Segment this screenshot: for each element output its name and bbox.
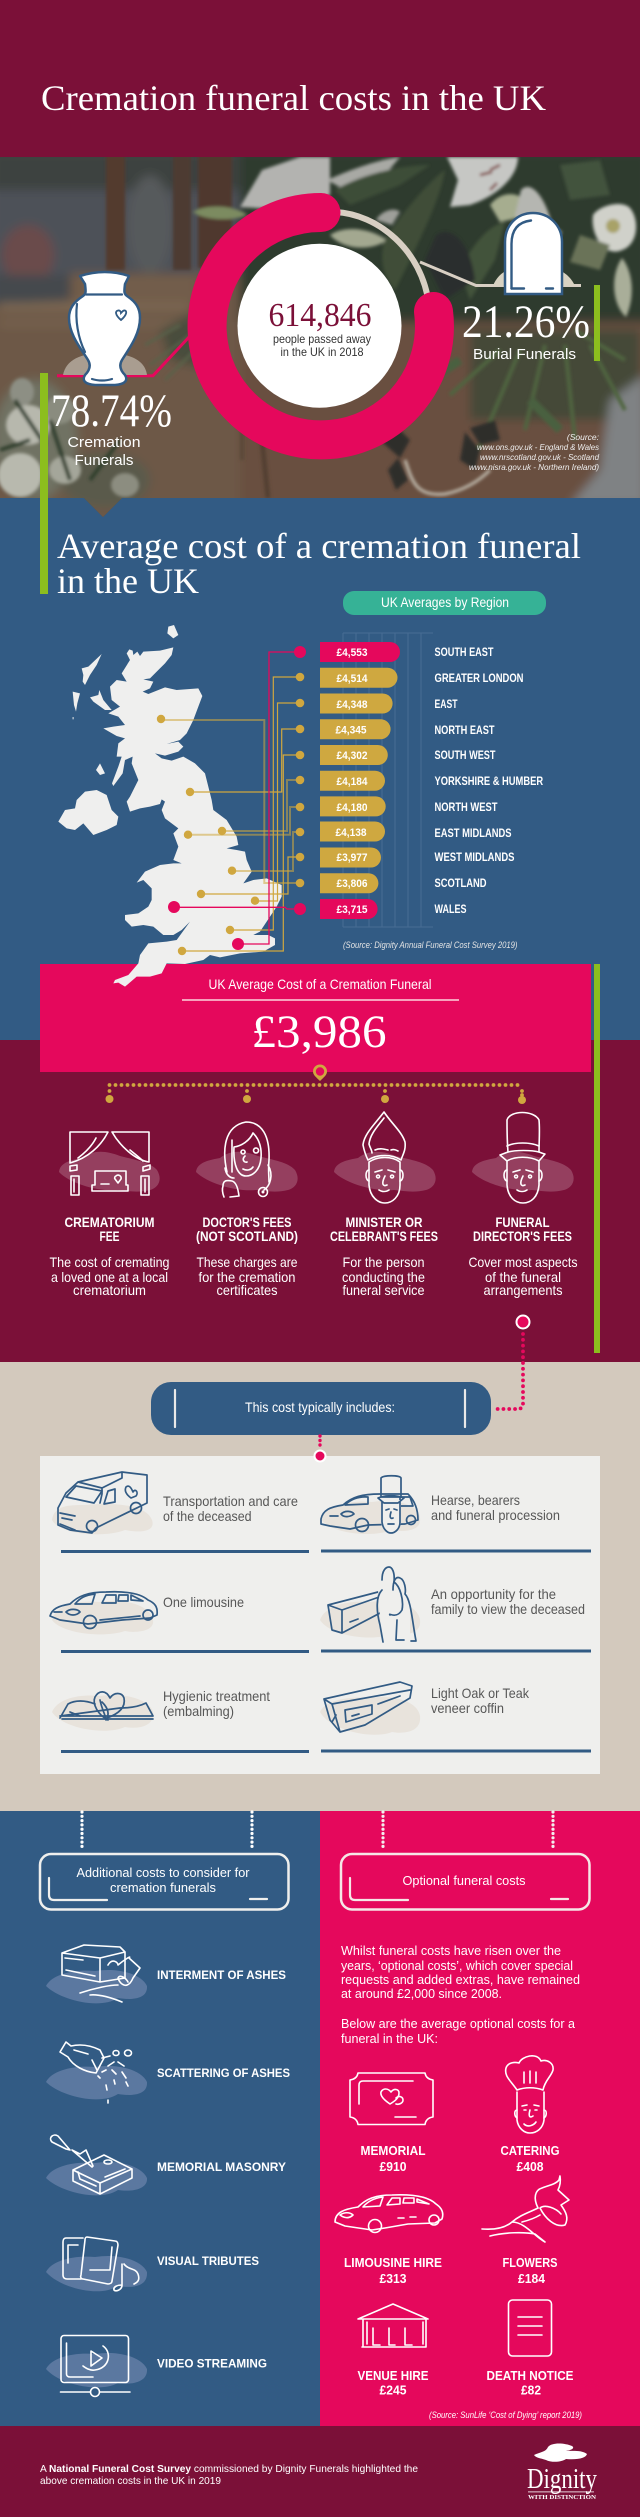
cremation ring — [207, 212, 434, 440]
section: fees background — [0, 1040, 640, 1362]
fee: doctor: DOCTOR'S FEES — [202, 1214, 292, 1230]
row: East Midlands: EAST MIDLANDS — [434, 828, 512, 840]
row: North West — [320, 796, 498, 816]
item: hearse and bearers: Hearse, bearers — [431, 1492, 520, 1508]
additional costs heading box — [40, 1854, 288, 1910]
chart grid — [343, 633, 433, 927]
item: visual tributes: VISUAL TRIBUTES — [157, 2254, 259, 2268]
pink dotted connector — [492, 1316, 530, 1409]
item: coffin: veneer coffin — [431, 1700, 504, 1716]
fee: minister: For the person — [342, 1254, 424, 1270]
item: video streaming — [46, 2336, 267, 2396]
burial connector line — [420, 262, 581, 286]
green accent bar — [40, 373, 48, 594]
icon: ambulance — [52, 1472, 153, 1534]
item: viewing: An opportunity for the — [431, 1586, 556, 1602]
cost: catering: CATERING — [500, 2143, 560, 2158]
row: North East: £4,345 — [336, 724, 366, 736]
fee: doctor — [196, 1122, 298, 1298]
icon: funeral director in top hat — [472, 1112, 574, 1203]
row: Greater London: £4,514 — [336, 673, 368, 685]
icon: limousine — [50, 1592, 157, 1634]
icon: photos and music note — [46, 2237, 147, 2291]
additional costs heading box: Additional costs to consider for — [76, 1865, 250, 1880]
source note: ONS, NRS, NISRA — [469, 432, 600, 472]
fee: funeral director — [468, 1112, 578, 1298]
footer text: above cremation costs in the UK in 2019 — [40, 2475, 221, 2487]
includes heading box: This cost typically includes: — [245, 1399, 395, 1415]
row: Wales: WALES — [434, 904, 467, 916]
Great Britain — [103, 647, 282, 987]
icon: family beside coffin — [320, 1567, 420, 1642]
fee: crematorium: CREMATORIUM — [64, 1214, 154, 1230]
row: Scotland — [320, 873, 486, 893]
Islay and Jura — [96, 763, 105, 775]
row: East Midlands — [320, 822, 512, 842]
includes heading box — [151, 1382, 491, 1435]
pink connector into panel — [314, 1436, 326, 1462]
heading: average cost — [57, 526, 581, 601]
icon: doctor with stethoscope — [196, 1122, 298, 1197]
heading: average cost: Average cost of a cremation funeral — [57, 526, 581, 566]
centre circle — [238, 244, 402, 408]
row: South West: £4,302 — [336, 750, 368, 762]
cost: venue hire — [358, 2304, 429, 2398]
row: South East: SOUTH EAST — [434, 647, 494, 659]
item: hearse and bearers: and funeral procession — [431, 1507, 560, 1523]
fee: funeral director: FUNERAL — [496, 1214, 550, 1230]
count caption — [273, 332, 371, 359]
row: Wales — [320, 899, 467, 919]
row: Yorkshire and Humber — [320, 771, 544, 791]
row: West Midlands: WEST MIDLANDS — [434, 852, 515, 864]
cost: flowers: FLOWERS — [502, 2255, 558, 2270]
row: Yorkshire and Humber: YORKSHIRE & HUMBER — [434, 776, 544, 788]
fee: minister — [330, 1112, 438, 1298]
burial arc — [335, 212, 429, 305]
fee: doctor: for the cremation — [198, 1269, 296, 1285]
row: Greater London — [320, 668, 524, 688]
footer text — [40, 2463, 418, 2487]
row: North West: £4,180 — [336, 802, 368, 814]
icon: gravestone — [493, 213, 575, 294]
fee: funeral director: of the funeral — [485, 1269, 561, 1285]
count caption: people passed away — [273, 332, 371, 346]
cost: venue hire: VENUE HIRE — [358, 2368, 429, 2383]
icon: notice page — [508, 2300, 552, 2356]
source note: ONS, NRS, NISRA: www.nrscotland.gov.uk - Scotland — [480, 452, 599, 462]
cost: death notice: DEATH NOTICE — [486, 2368, 574, 2383]
row: South East: £4,553 — [336, 647, 368, 659]
cost: memorial — [350, 2073, 433, 2174]
item: interment of ashes — [46, 1945, 286, 2003]
hanging dots — [383, 1812, 553, 1849]
icon: hearse with bearer — [320, 1476, 420, 1534]
fee: crematorium — [50, 1132, 170, 1298]
cost: limousine hire: £313 — [380, 2271, 406, 2286]
stat: burial share — [462, 285, 600, 363]
panel: optional costs — [320, 1811, 640, 2426]
fee: minister: CELEBRANT'S FEES — [330, 1228, 438, 1244]
cost: death notice — [486, 2300, 574, 2398]
fee: crematorium: The cost of cremating — [50, 1254, 170, 1270]
header band — [0, 0, 640, 157]
item: visual tributes — [46, 2237, 259, 2291]
source note: ONS, NRS, NISRA: www.nisra.gov.uk - Northern Ireland) — [469, 462, 599, 472]
row: South East — [320, 642, 494, 662]
optional costs heading box: Optional funeral costs — [402, 1873, 526, 1888]
bar chart: regional averages — [320, 642, 544, 919]
icon: urn — [63, 272, 147, 385]
row: North East: NORTH EAST — [434, 725, 494, 737]
item: scattering of ashes — [46, 2042, 290, 2103]
stat: cremation share: Funerals — [74, 453, 134, 469]
row: South West — [320, 745, 496, 765]
item: video streaming: VIDEO STREAMING — [157, 2356, 267, 2370]
stat: burial share: 21.26% — [462, 296, 590, 348]
source note: ONS, NRS, NISRA: www.ons.gov.uk - England & Wales — [477, 442, 600, 452]
stat: cremation share: 78.74% — [51, 385, 172, 437]
cost: death notice: £82 — [521, 2382, 541, 2398]
item: viewing: family to view the deceased — [431, 1601, 585, 1617]
item: coffin — [320, 1682, 530, 1735]
heading: average cost: in the UK — [57, 561, 199, 601]
gold connector tree — [106, 1065, 526, 1104]
fee: crematorium: FEE — [100, 1228, 120, 1244]
row: North East — [320, 719, 494, 739]
green accent bar — [594, 285, 600, 361]
item: embalming: Hygienic treatment — [163, 1688, 270, 1704]
item: limousine: One limousine — [163, 1594, 244, 1610]
icon: venue building — [358, 2304, 428, 2347]
icon: chisel and stone — [46, 2135, 147, 2195]
cost: memorial: MEMORIAL — [360, 2143, 426, 2158]
item: coffin: Light Oak or Teak — [431, 1685, 530, 1701]
stat: cremation share — [40, 373, 172, 594]
cost: flowers — [482, 2176, 569, 2286]
row: Wales: £3,715 — [336, 904, 368, 916]
intro text: requests and added extras, have remained — [341, 1972, 580, 1987]
source note: SunLife: (Source: SunLife ‘Cost of Dying’ report 2019) — [429, 2410, 582, 2420]
title: Cremation funeral costs in the UK — [41, 78, 546, 118]
UK average cost panel: £3,986 — [252, 1006, 386, 1058]
row: Scotland: £3,806 — [336, 878, 368, 890]
fee: funeral director: Cover most aspects — [468, 1254, 578, 1270]
total count: 614,846 — [268, 297, 372, 334]
stat: cremation share: Cremation — [68, 435, 140, 451]
fee: minister: MINISTER OR — [346, 1214, 422, 1230]
cost: catering — [500, 2056, 560, 2174]
source note: ONS, NRS, NISRA: (Source: — [567, 432, 600, 442]
intro text: Whilst funeral costs have risen over the — [341, 1943, 561, 1958]
item: embalming: (embalming) — [163, 1703, 234, 1719]
row: Greater London: GREATER LONDON — [434, 673, 524, 685]
icon: lily — [482, 2176, 569, 2242]
optional costs heading box — [341, 1854, 590, 1910]
Northern Ireland — [58, 790, 118, 835]
row: West Midlands: £3,977 — [336, 852, 368, 864]
row: Scotland: SCOTLAND — [434, 878, 486, 890]
icon: memorial plaque — [350, 2073, 433, 2124]
UK average cost panel: UK Average Cost of a Cremation Funeral — [208, 976, 432, 992]
cost: flowers: £184 — [518, 2271, 546, 2286]
fee: crematorium: crematorium — [73, 1282, 146, 1298]
donut chart: 614,846 deaths — [57, 212, 581, 440]
item: scattering of ashes: SCATTERING OF ASHES — [157, 2066, 290, 2080]
Dignity logo: WITH DISTINCTION — [528, 2495, 597, 2501]
fee: minister: funeral service — [342, 1282, 425, 1298]
cost: venue hire: £245 — [380, 2382, 406, 2398]
fee: crematorium: a loved one at a local — [51, 1269, 168, 1285]
South Uist and Barra — [72, 692, 80, 720]
intro text — [341, 1943, 580, 2046]
item: transportation — [52, 1472, 298, 1534]
intro text: Below are the average optional costs for a — [341, 2016, 576, 2031]
UK average cost panel — [40, 964, 591, 1072]
row: Yorkshire and Humber: £4,184 — [336, 776, 368, 788]
row: West Midlands — [320, 848, 515, 868]
section: average cost background — [0, 498, 640, 1040]
row: East — [320, 694, 458, 714]
footer — [0, 2426, 640, 2517]
green accent bar: fees — [594, 964, 600, 1353]
item: transportation: Transportation and care — [163, 1493, 298, 1509]
cost: memorial: £910 — [380, 2159, 406, 2174]
additional costs heading box: cremation funerals — [110, 1880, 216, 1895]
panel: additional costs — [0, 1811, 320, 2426]
Dignity logo: Dignity — [527, 2464, 597, 2495]
cost: limousine hire — [335, 2195, 443, 2286]
posts — [0, 150, 636, 498]
item: transportation: of the deceased — [163, 1508, 252, 1524]
intro text: at around £2,000 since 2008. — [341, 1986, 502, 2001]
count caption: in the UK in 2018 — [280, 345, 364, 359]
icon: limousine — [335, 2195, 443, 2232]
row: East: EAST — [434, 699, 458, 711]
footer text: A National Funeral Cost Survey commissioned by Dignity Funerals highlighted the — [40, 2463, 418, 2475]
row: North West: NORTH WEST — [434, 802, 498, 814]
fee: funeral director: DIRECTOR'S FEES — [473, 1228, 572, 1244]
Skye — [90, 690, 112, 710]
hanging dots — [82, 1812, 252, 1849]
item: viewing — [320, 1567, 585, 1642]
fee: funeral director: arrangements — [484, 1282, 562, 1298]
photo background: coffin and flowers — [0, 150, 640, 530]
item: memorial masonry: MEMORIAL MASONRY — [157, 2160, 286, 2174]
region pill heading — [343, 591, 546, 615]
fee: minister: conducting the — [342, 1269, 425, 1285]
includes panel — [40, 1456, 600, 1774]
Orkney — [167, 625, 178, 638]
item: interment of ashes: INTERMENT OF ASHES — [157, 1968, 286, 1982]
row: South West: SOUTH WEST — [434, 750, 496, 762]
map connectors — [157, 646, 306, 955]
icon: coffin — [320, 1682, 420, 1735]
item: limousine — [50, 1592, 244, 1634]
icon: crematorium curtains — [59, 1132, 160, 1195]
source note: Dignity survey: (Source: Dignity Annual Funeral Cost Survey 2019) — [343, 940, 518, 950]
icon: body on table with heart — [52, 1692, 153, 1731]
fee: doctor: certificates — [216, 1282, 278, 1298]
cremation connector line — [57, 336, 190, 376]
intro text: funeral in the UK: — [341, 2031, 438, 2046]
item: memorial masonry — [46, 2135, 286, 2195]
item: hearse and bearers — [320, 1476, 560, 1534]
icon: tipped urn — [46, 2042, 147, 2103]
cost: limousine hire: LIMOUSINE HIRE — [344, 2255, 442, 2270]
cost: catering: £408 — [516, 2159, 544, 2174]
fee: doctor: These charges are — [196, 1254, 298, 1270]
icon: casket and flowers — [46, 1945, 147, 2003]
row: East Midlands: £4,138 — [336, 827, 366, 839]
stat: burial share: Burial Funerals — [473, 347, 576, 363]
icon: chef — [506, 2056, 553, 2133]
Outer Hebrides — [82, 654, 102, 685]
item: embalming — [52, 1688, 270, 1731]
section: includes background — [0, 1362, 640, 1811]
row: East: £4,348 — [336, 699, 368, 711]
fee: doctor: (NOT SCOTLAND) — [196, 1228, 298, 1244]
icon: minister with mitre — [334, 1112, 436, 1203]
Dignity logo — [527, 2444, 597, 2501]
region pill heading: UK Averages by Region — [381, 594, 509, 610]
map of the UK — [58, 625, 282, 987]
icon: video player — [46, 2336, 147, 2396]
intro text: years, ‘optional costs’, which cover special — [341, 1958, 573, 1973]
